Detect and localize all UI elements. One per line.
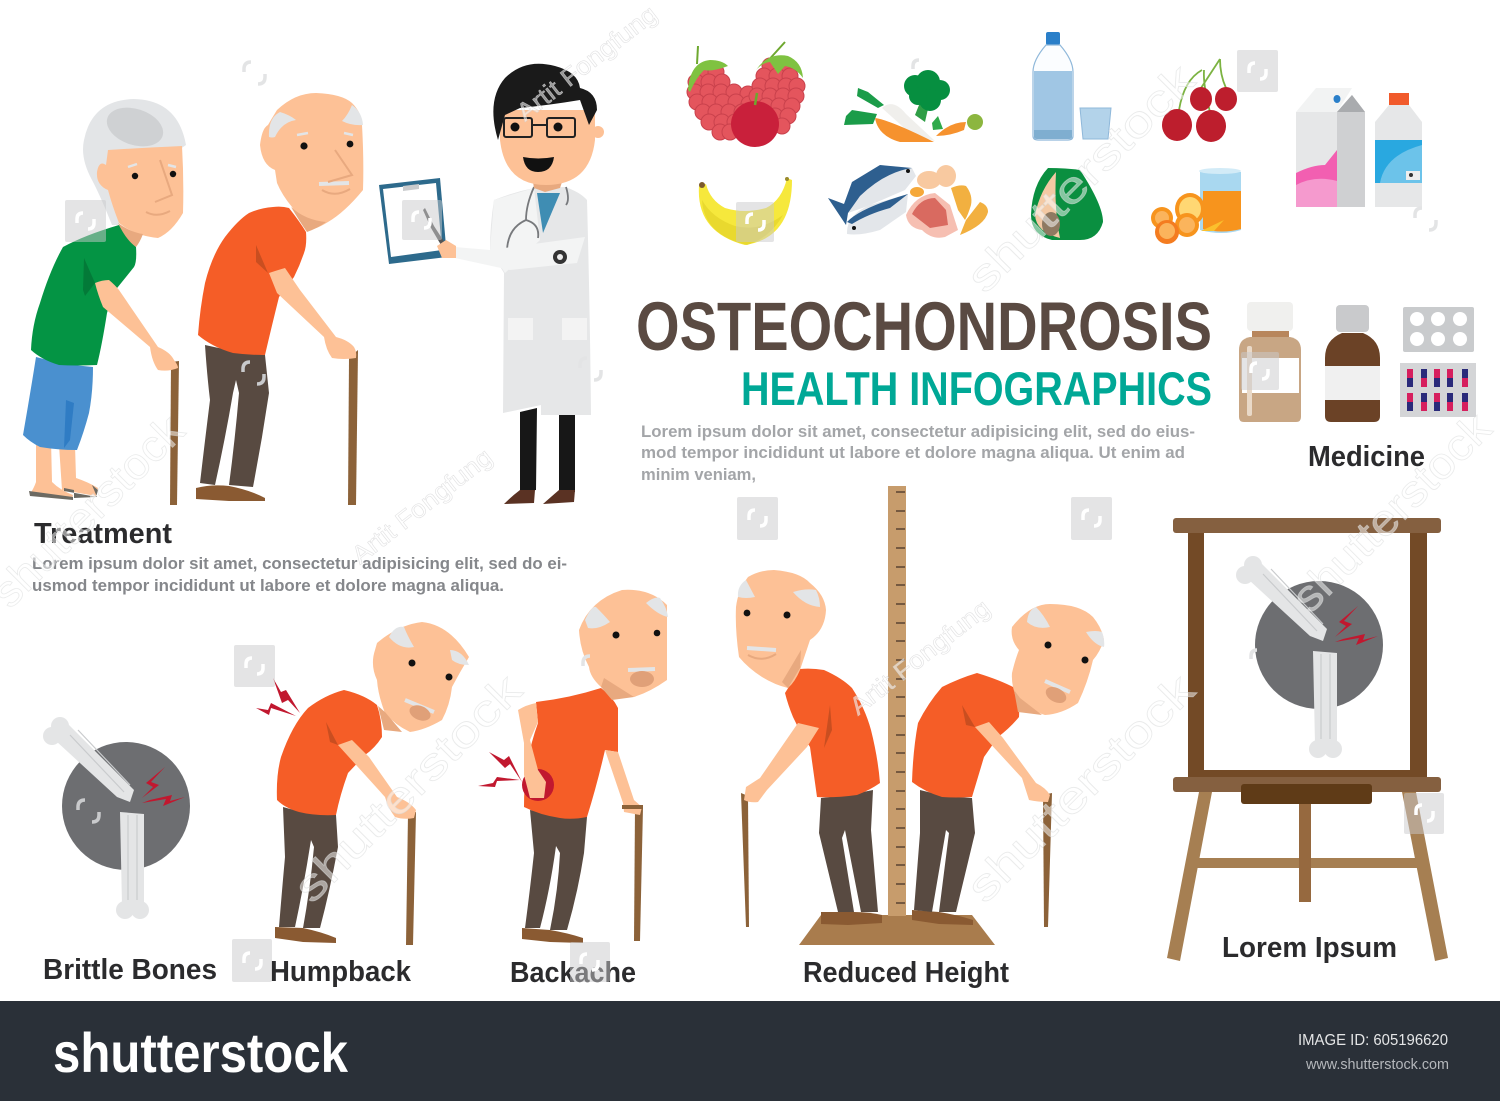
doctor with clipboard <box>379 64 604 504</box>
label: Medicine: Medicine <box>1308 441 1425 473</box>
watermark overlay: shutterstock <box>1282 403 1500 622</box>
label: Humpback: Humpback <box>270 956 412 988</box>
image id: IMAGE ID: 605196620 <box>1298 1032 1448 1049</box>
intro paragraph: Lorem ipsum dolor sit amet, consectetur adipisicing elit, sed do eius- <box>641 422 1195 441</box>
subtitle: HEALTH INFOGRAPHICS <box>741 362 1212 415</box>
intro paragraph: minim veniam, <box>641 465 756 484</box>
heading: Treatment: Treatment <box>34 518 172 550</box>
icon: raspberries and apple <box>687 42 805 147</box>
icon: water bottle and glass <box>1033 32 1111 140</box>
icon: white pill blister <box>1403 307 1474 352</box>
label: Backache: Backache <box>510 957 636 989</box>
icon: capsule blister <box>1400 363 1476 417</box>
icon: avocado <box>1031 168 1103 240</box>
icon: cherries <box>1162 59 1237 142</box>
website: www.shutterstock.com <box>1305 1057 1449 1073</box>
reduced height figure, shorter <box>912 604 1104 927</box>
label: Lorem Ipsum: Lorem Ipsum <box>1222 932 1397 964</box>
watermark overlay: shutterstock <box>957 54 1205 302</box>
icon: medicine bottle, brown <box>1325 305 1380 422</box>
easel with bone illustration <box>1167 518 1448 961</box>
footer bar <box>0 1001 1500 1101</box>
brittle bone illustration <box>43 717 190 919</box>
intro paragraph <box>641 422 1195 484</box>
height ruler and base <box>799 486 995 945</box>
backache figure <box>478 590 668 943</box>
watermark overlay: shutterstock <box>284 664 532 912</box>
title: OSTEOCHONDROSIS <box>636 288 1212 365</box>
treatment paragraph: usmod tempor incididunt ut labore et dolore magna aliqua. <box>32 576 504 595</box>
patient in green shirt <box>23 99 186 505</box>
icon: milk carton and milk bottle <box>1296 88 1422 207</box>
watermark overlay: shutterstock <box>957 664 1205 912</box>
patient in orange shirt <box>196 93 363 505</box>
watermark overlay: Artit Fongfung <box>346 443 498 570</box>
watermark overlay: Artit Fongfung <box>844 594 996 721</box>
label: Brittle Bones: Brittle Bones <box>43 954 217 986</box>
reduced height figure, taller <box>736 570 882 927</box>
icon: vegetables <box>844 70 983 142</box>
icon: fish, eggs and meat <box>828 165 988 238</box>
footer logo: shutterstock <box>53 1021 349 1084</box>
icon: juice and oranges <box>1151 168 1241 244</box>
label: Reduced Height: Reduced Height <box>803 957 1009 989</box>
intro paragraph: mod tempor incididunt ut labore et dolore magna aliqua. Ut enim ad <box>641 443 1185 462</box>
icon: medicine bottle, tan <box>1239 302 1301 422</box>
humpback figure <box>256 622 469 945</box>
treatment paragraph: Lorem ipsum dolor sit amet, consectetur adipisicing elit, sed do ei- <box>32 554 567 573</box>
treatment paragraph <box>32 554 567 595</box>
icon: banana <box>699 177 792 245</box>
watermark overlay: Artit Fongfung <box>511 0 663 127</box>
